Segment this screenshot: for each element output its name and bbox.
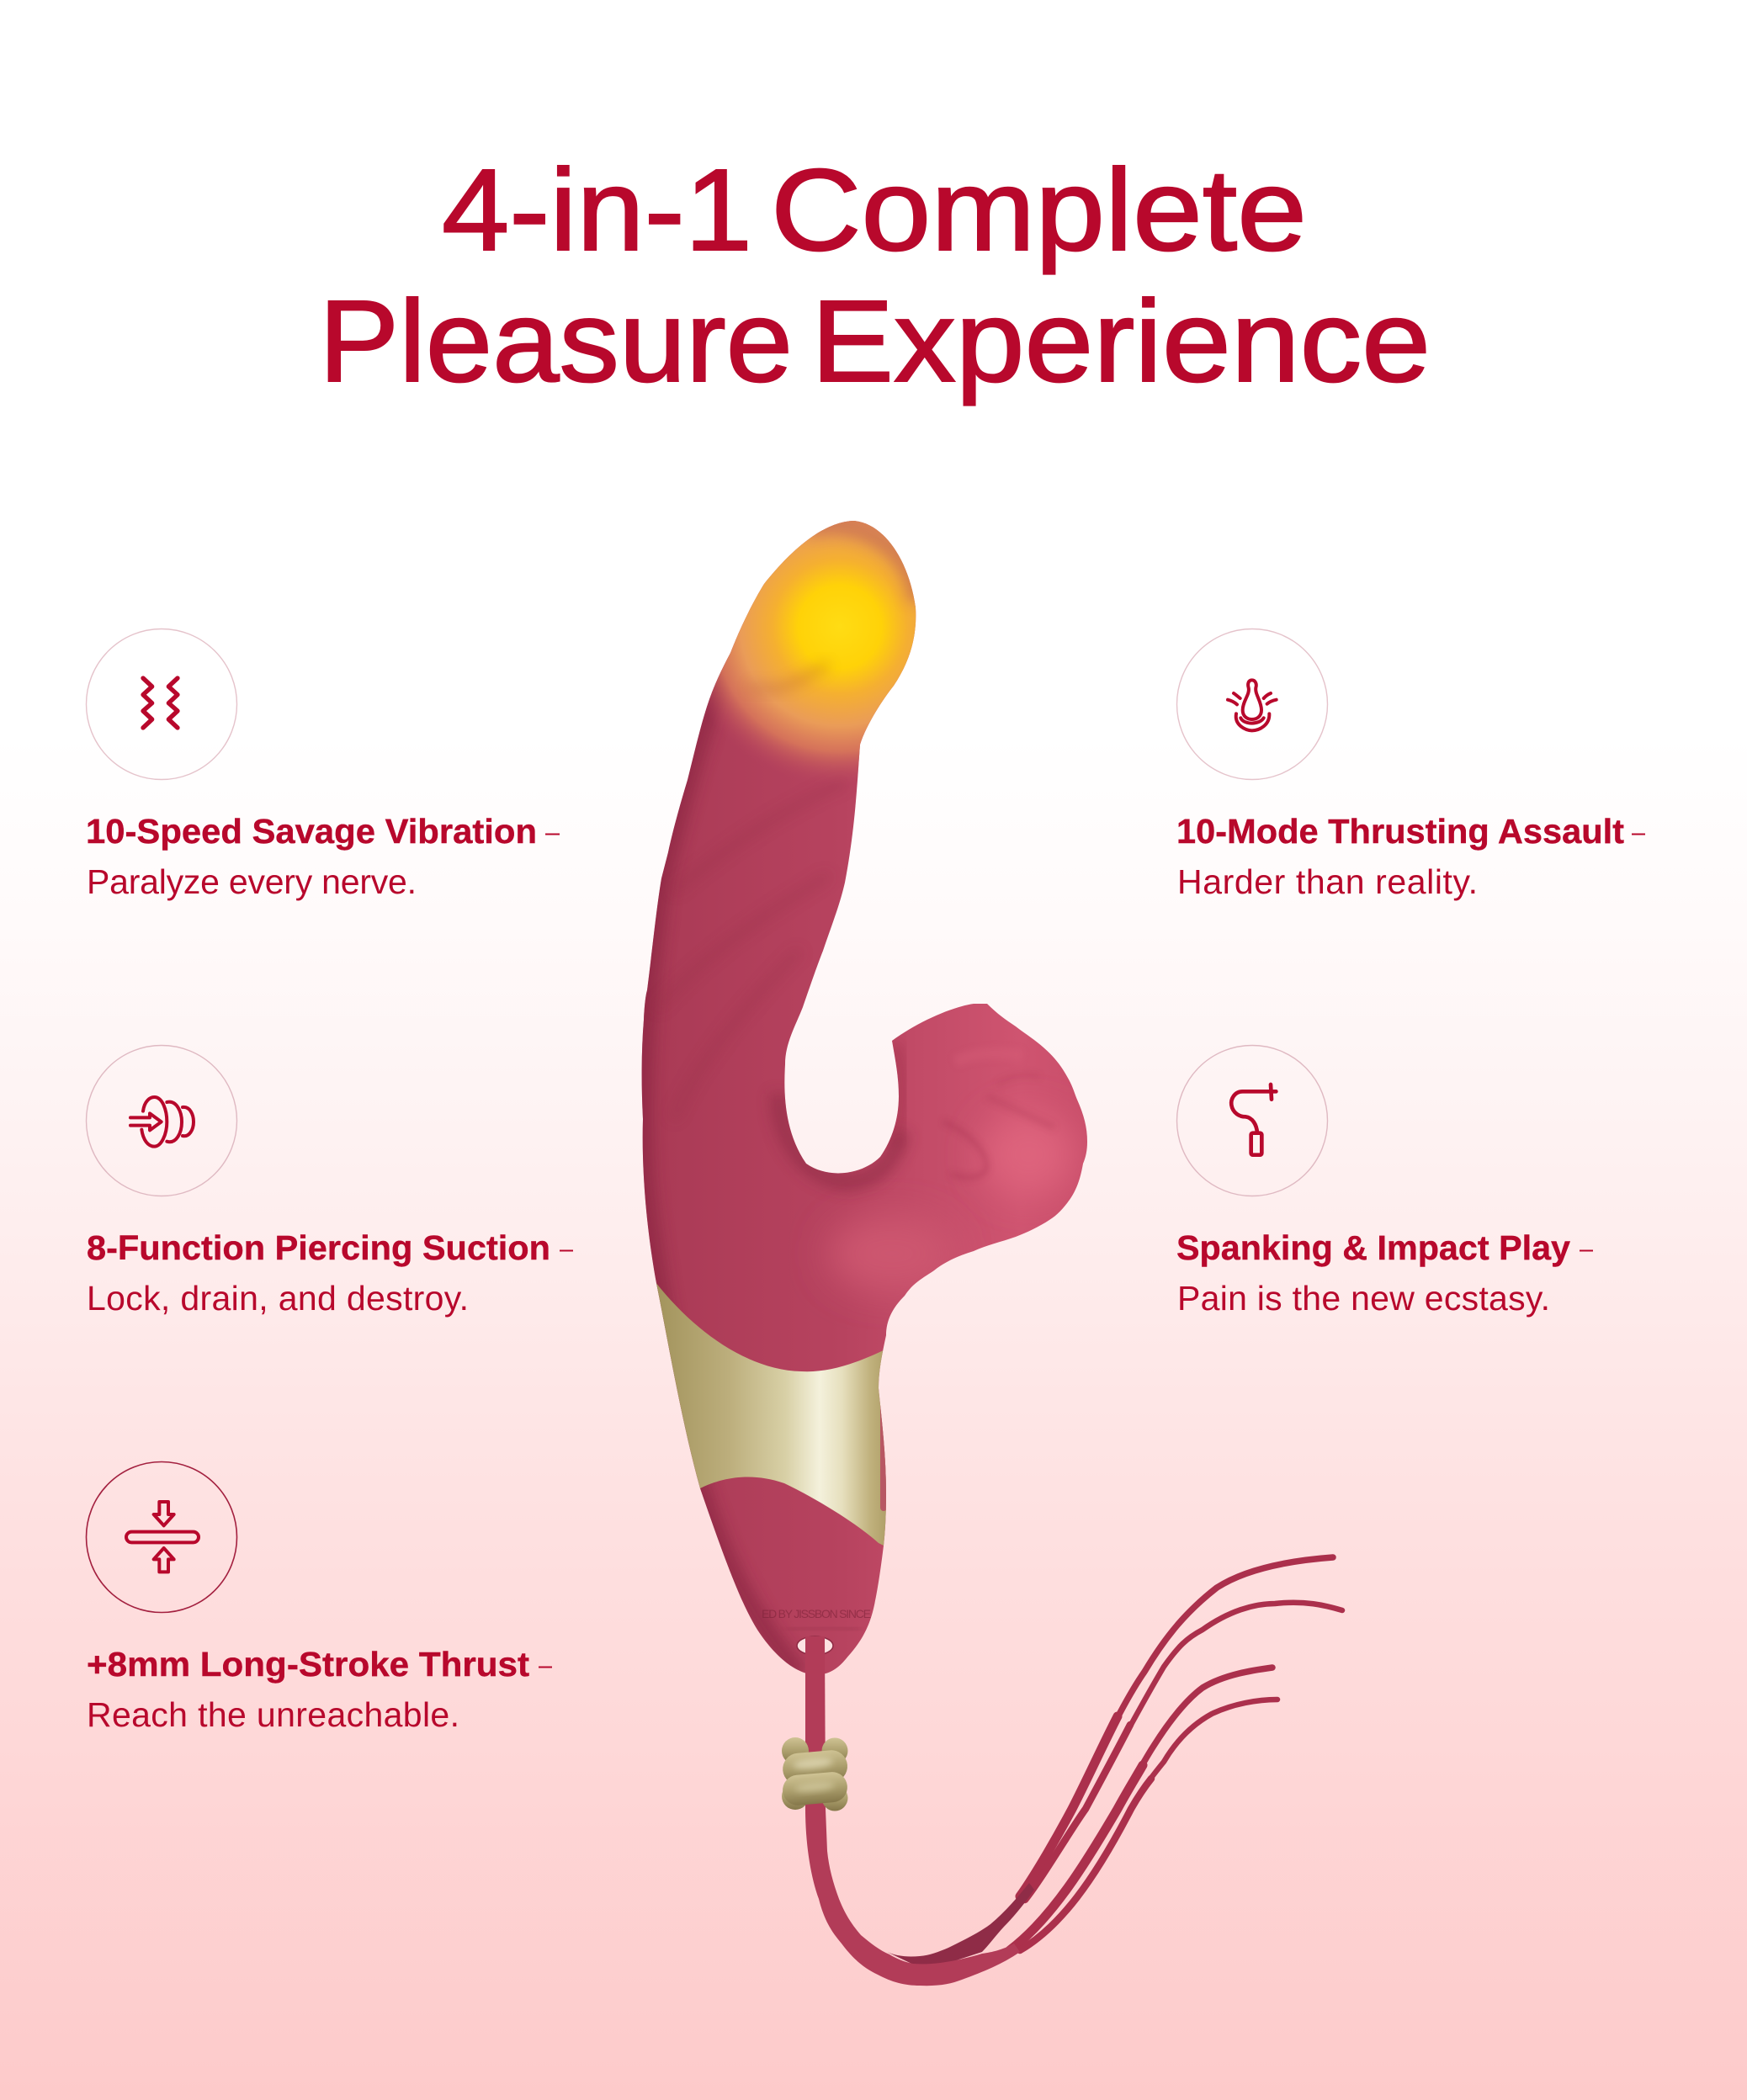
feature text (1176, 1228, 1593, 1318)
icon: vibration waves (86, 629, 237, 779)
feature text: 10-Mode Thrusting Assault (1176, 812, 1624, 851)
title: Experience (811, 277, 1431, 406)
feature text: Reach the unreachable. (87, 1695, 459, 1734)
feature text: Pain is the new ecstasy. (1177, 1279, 1550, 1318)
base crease (787, 1628, 860, 1630)
icon: splash drop (1176, 629, 1328, 779)
strands (1010, 1557, 1342, 1950)
lip shading (892, 1043, 902, 1144)
tip dark ridge (749, 665, 829, 689)
feature: 10-speed savage vibration (86, 629, 560, 901)
feature text: 8-Function Piercing Suction (87, 1228, 550, 1267)
feature: 8-function piercing suction (86, 1045, 573, 1318)
feature text: – (560, 1235, 573, 1263)
product body (641, 521, 1087, 1674)
feature text: Paralyze every nerve. (87, 862, 417, 901)
lower main cord (805, 1809, 1020, 1986)
dark inner cord branch (884, 1883, 1034, 1970)
shaft highlight (829, 1216, 955, 1291)
feature text (87, 1645, 552, 1734)
tip shade (808, 525, 917, 602)
icon: suction arrow (86, 1045, 237, 1196)
cord loop hole (797, 1636, 833, 1655)
whip cord and tassel strands (805, 1557, 1342, 1986)
feature text (87, 1228, 573, 1318)
feature: long-stroke thrust (86, 1462, 552, 1734)
gold knot (782, 1737, 849, 1811)
feature text (86, 812, 560, 901)
title (319, 146, 1431, 406)
title: Complete (771, 146, 1307, 275)
left edge shadow (643, 653, 799, 1674)
title: 4-in-1 (442, 146, 752, 275)
feature text: 10-Speed Savage Vibration (86, 812, 537, 851)
feature text (1176, 812, 1645, 901)
arch shadow (778, 1094, 902, 1182)
feature text: – (545, 819, 560, 846)
ridges and folds (656, 782, 846, 1119)
icon: compress arrows (86, 1462, 237, 1612)
feature text: Spanking & Impact Play (1176, 1228, 1570, 1267)
icon: whip (1176, 1045, 1328, 1196)
feature text: Harder than reality. (1177, 862, 1478, 901)
feature: 10-mode thrusting assault (1176, 629, 1645, 901)
side button (880, 1405, 886, 1511)
heated tip glow (709, 521, 916, 777)
feature text: Lock, drain, and destroy. (87, 1279, 469, 1318)
title: Pleasure (319, 277, 793, 406)
feature text: – (1580, 1235, 1593, 1263)
feature text: – (539, 1652, 552, 1679)
feature text: – (1632, 819, 1645, 846)
upper cord (805, 1636, 826, 1811)
feature text: +8mm Long-Stroke Thrust (87, 1645, 529, 1684)
gold band (656, 1284, 886, 1546)
feature: spanking and impact play (1176, 1045, 1593, 1318)
base engraving: ED BY JISSBON SINCE (762, 1607, 871, 1620)
head highlight (982, 1112, 1075, 1196)
head creases (959, 1107, 1050, 1179)
